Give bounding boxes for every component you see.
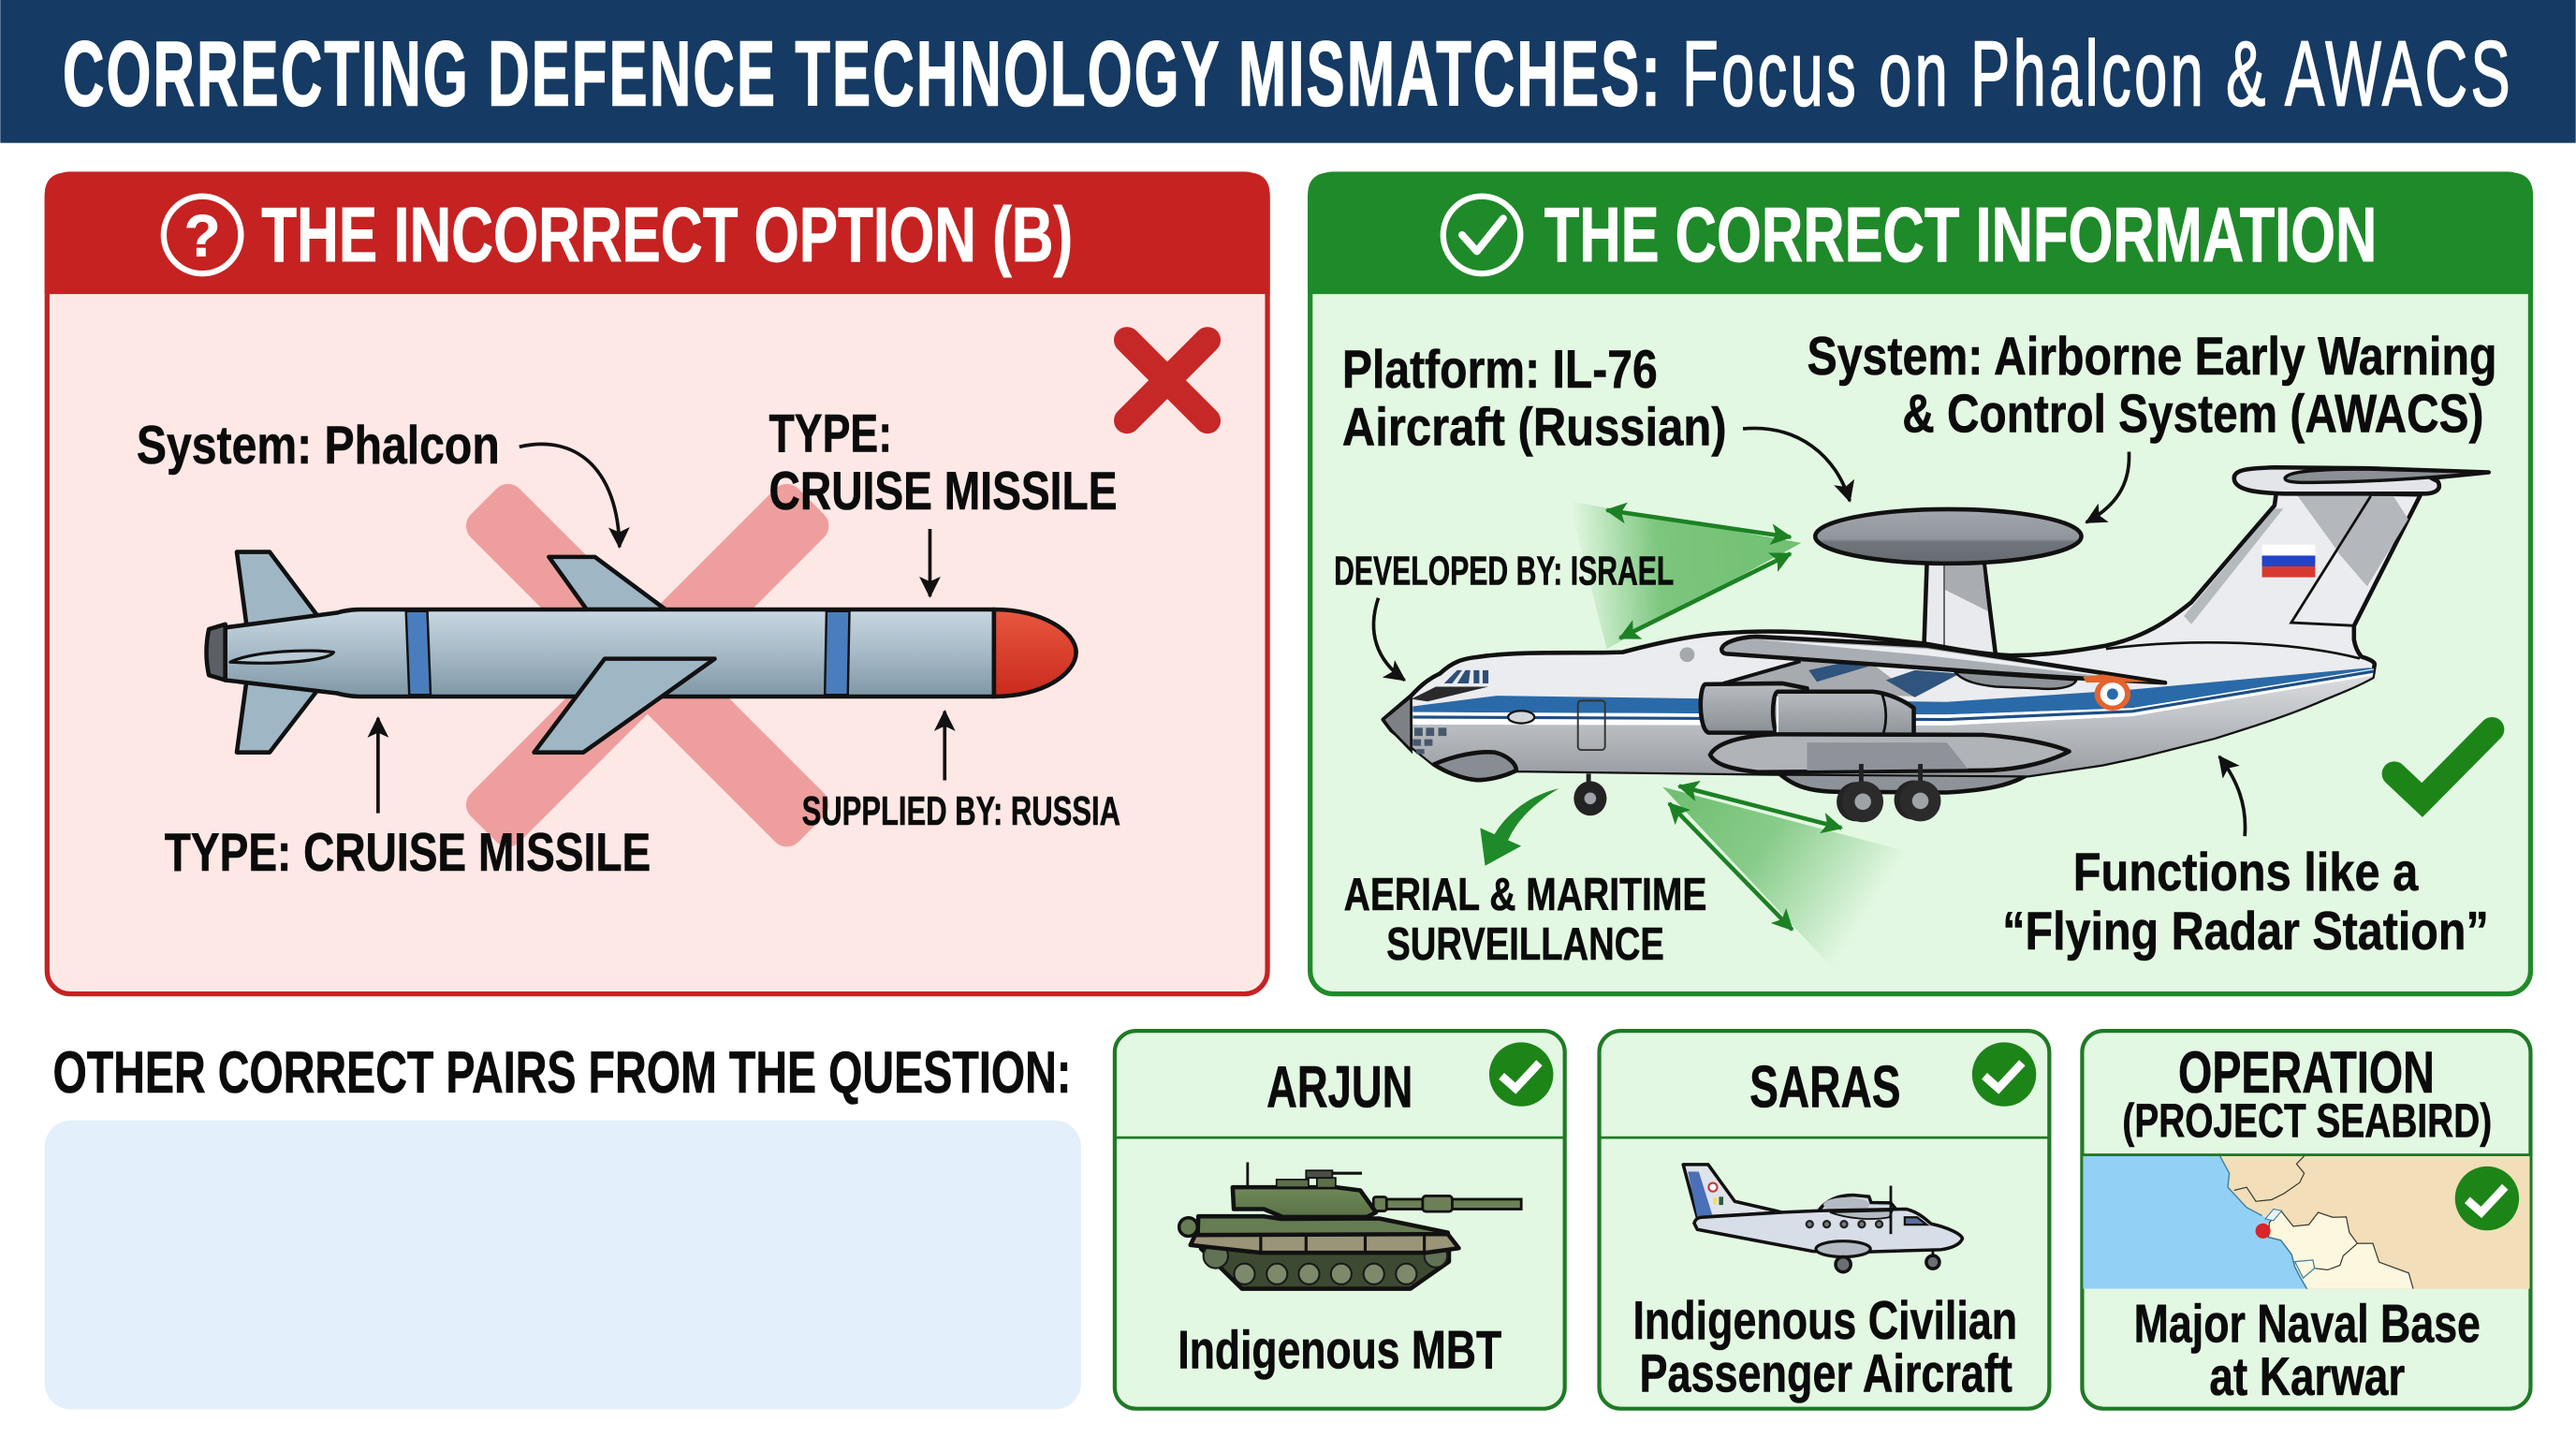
arrow: system to dome xyxy=(2086,452,2130,522)
turret xyxy=(1233,1187,1376,1217)
fuselage xyxy=(1694,1209,1962,1252)
icon: check badge xyxy=(1972,1042,2036,1107)
functions label xyxy=(2002,843,2489,961)
radar beams upper xyxy=(1569,501,1801,649)
under-wing fairing xyxy=(1954,672,2076,689)
card caption: naval base xyxy=(2134,1295,2481,1407)
propeller xyxy=(1890,1186,1892,1234)
roundel xyxy=(2095,678,2130,711)
illustration: AWACS aircraft xyxy=(1383,467,2489,822)
card caption: civilian aircraft xyxy=(1632,1291,2017,1403)
card title: Arjun: ARJUN xyxy=(1266,1055,1412,1121)
map: Karwar coast xyxy=(2083,1155,2530,1289)
title banner xyxy=(0,0,2576,143)
type label top: CRUISE MISSILE xyxy=(769,462,1118,521)
panel: the incorrect option xyxy=(45,172,1270,994)
radar beams lower xyxy=(1662,786,1906,979)
rotodome xyxy=(1815,509,2082,564)
surveillance label xyxy=(1344,870,1706,970)
engine 1 xyxy=(1701,683,1807,733)
cockpit band xyxy=(1412,686,1488,701)
arrow: thick green curved xyxy=(1480,788,1559,866)
functions label: “Flying Radar Station” xyxy=(2002,902,2489,961)
arrow: type to body xyxy=(929,529,931,596)
landing gear fairing xyxy=(1710,734,2070,772)
map pin xyxy=(2256,1224,2271,1239)
nacelle underside xyxy=(1830,1211,1893,1219)
arrow: functions to aircraft xyxy=(2219,756,2246,836)
belly fairing xyxy=(1774,769,2032,792)
card: Arjun xyxy=(1115,1031,1565,1409)
illustration: Saras aircraft xyxy=(1683,1165,1962,1272)
fuselage markings xyxy=(1390,494,2408,792)
arrow: developed by to nose xyxy=(1373,598,1405,680)
system label xyxy=(1807,327,2496,444)
arrow: phalcon to missile xyxy=(520,444,620,547)
cabin windows xyxy=(1807,1221,1882,1227)
icon: question mark circle: ? xyxy=(184,204,220,270)
type label top xyxy=(769,404,1118,521)
blue bands xyxy=(406,611,849,695)
rotodome pylon xyxy=(1924,562,1996,657)
cockpit windows xyxy=(1444,670,1488,683)
road wheels xyxy=(1234,1264,1416,1284)
chin fairing xyxy=(1434,752,1516,780)
engine pylons xyxy=(1723,660,1960,697)
icon: question mark circle xyxy=(164,197,241,273)
nose cone xyxy=(994,609,1076,697)
side skirt xyxy=(1191,1234,1458,1253)
card caption: Indigenous MBT: Indigenous MBT xyxy=(1178,1321,1501,1381)
developed by label: DEVELOPED BY: ISRAEL xyxy=(1334,549,1674,594)
nose radome xyxy=(1383,697,1412,751)
rear drum xyxy=(1179,1218,1197,1236)
landing gear xyxy=(1573,764,1941,822)
tail fins xyxy=(237,552,666,753)
card: Saras xyxy=(1600,1031,2049,1409)
nacelle and wing xyxy=(1819,1196,1897,1211)
wing highlight and tip xyxy=(1761,639,2148,682)
tail cap xyxy=(207,624,226,680)
surveillance label: AERIAL & MARITIME xyxy=(1344,870,1706,920)
icon: check badge xyxy=(1489,1042,1553,1107)
card title: Operation xyxy=(2122,1040,2492,1147)
main wing xyxy=(534,659,715,753)
supplied by label: SUPPLIED BY: RUSSIA xyxy=(802,788,1120,834)
panel: the correct information xyxy=(1308,172,2533,994)
icon: large green check xyxy=(2394,729,2492,800)
lower nose windows xyxy=(1412,727,1446,754)
illustration: cruise missile xyxy=(207,552,1076,753)
title text: CORRECTING DEFENCE TECHNOLOGY MISMATCHES: xyxy=(63,22,1662,125)
fuselage xyxy=(1383,492,2421,780)
incorrect heading: THE INCORRECT OPTION (B) xyxy=(261,192,1073,278)
door xyxy=(1578,700,1605,750)
pale blue empty panel xyxy=(45,1121,1081,1410)
tracks xyxy=(1201,1249,1449,1289)
platform label xyxy=(1342,340,1727,458)
commander hatch and antenna xyxy=(1248,1162,1362,1188)
illustration: tank xyxy=(1179,1162,1521,1289)
surveillance label: SURVEILLANCE xyxy=(1386,919,1664,970)
type label top: TYPE: xyxy=(769,404,892,464)
card caption: naval base: at Karwar xyxy=(2209,1347,2405,1407)
functions label: Functions like a xyxy=(2073,843,2419,902)
card caption: civilian aircraft: Passenger Aircraft xyxy=(1640,1343,2012,1403)
engine 2 xyxy=(1773,692,1914,741)
other pairs heading: OTHER CORRECT PAIRS FROM THE QUESTION: xyxy=(52,1040,1071,1106)
type label bottom: TYPE: CRUISE MISSILE xyxy=(165,823,651,883)
porthole xyxy=(1508,711,1534,724)
card title: Saras: SARAS xyxy=(1749,1055,1901,1121)
icon: large faded cross xyxy=(460,477,836,854)
icon: check badge xyxy=(2455,1167,2519,1230)
missile body xyxy=(226,609,994,697)
arrow: supplied by up xyxy=(944,712,945,780)
arrow: platform to dome xyxy=(1743,428,1850,501)
system label: System: Phalcon xyxy=(137,416,500,476)
card title: Operation: OPERATION xyxy=(2178,1040,2435,1106)
arrow: bottom type up xyxy=(377,718,379,814)
tailplane xyxy=(2234,467,2489,493)
gun barrel xyxy=(1373,1196,1521,1211)
Russian flag xyxy=(2262,545,2315,578)
wing xyxy=(1721,637,2165,682)
tail fin xyxy=(1683,1165,1781,1217)
wheels xyxy=(1836,1249,1939,1272)
hull xyxy=(1197,1216,1448,1236)
icon: check circle xyxy=(1443,197,1520,273)
card: Operation Seabird xyxy=(2082,1031,2530,1409)
platform label: Aircraft (Russian) xyxy=(1342,398,1727,458)
card caption: civilian aircraft: Indigenous Civilian xyxy=(1632,1291,2017,1351)
card caption: naval base: Major Naval Base xyxy=(2134,1295,2481,1355)
idlers xyxy=(1204,1243,1447,1269)
cockpit window xyxy=(1905,1217,1926,1225)
lower engine xyxy=(1816,1241,1870,1257)
platform label: Platform: IL-76 xyxy=(1342,340,1658,400)
icon: red cross mark xyxy=(1127,340,1208,420)
intake xyxy=(230,651,334,663)
